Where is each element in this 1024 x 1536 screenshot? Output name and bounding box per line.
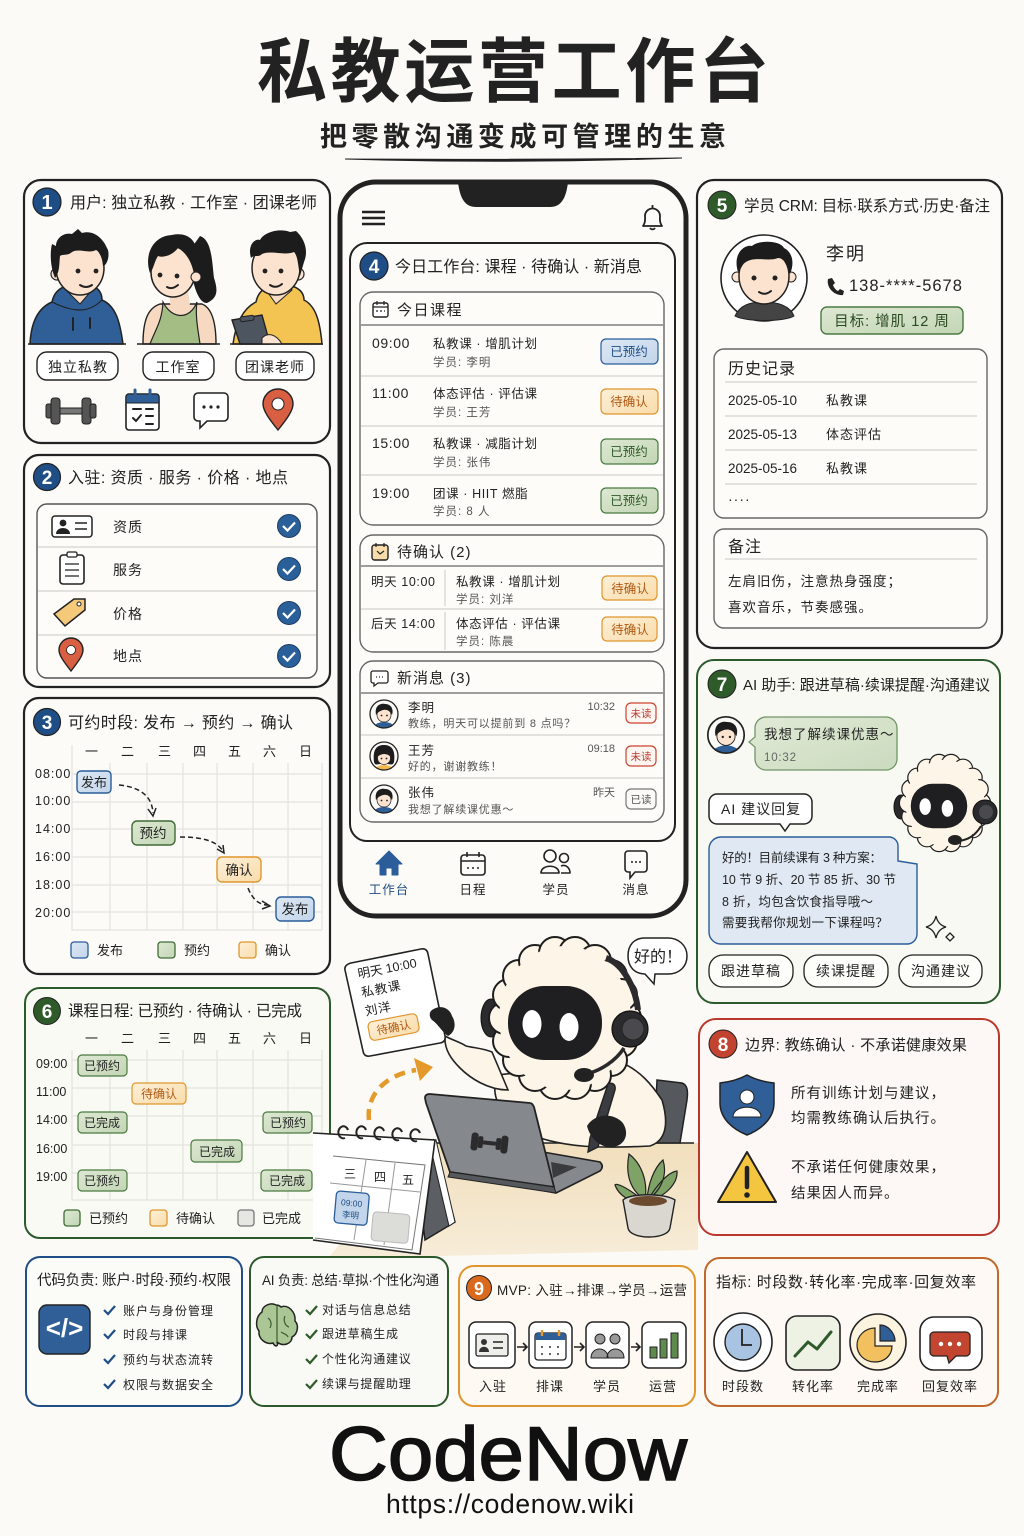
step: operations xyxy=(642,1322,686,1394)
panel 1: users xyxy=(24,180,330,443)
notes box: 喜欢音乐，节奏感强。 xyxy=(728,599,873,615)
nav: messages: 消息 xyxy=(622,882,650,897)
pen and hand xyxy=(587,1083,626,1152)
reply bubble: 10 节 9 折、20 节 85 折、30 节 xyxy=(722,872,896,887)
booking card: 私教课 xyxy=(360,977,403,1000)
step: onboarding: 入驻 xyxy=(479,1379,507,1394)
message li ming xyxy=(370,700,656,736)
row: location: 地点 xyxy=(113,648,143,664)
card: new messages xyxy=(360,661,664,822)
phone number: 138-****-5678 xyxy=(849,277,963,295)
row 11:00: 11:00 xyxy=(372,385,409,401)
schedule grid 6: 三 xyxy=(158,1031,172,1046)
schedule grid xyxy=(35,744,322,930)
schedule grid: 08:00 xyxy=(35,767,71,781)
row 11:00 xyxy=(372,385,658,419)
card: today's classes: 今日课程 xyxy=(397,302,463,319)
icon: warning xyxy=(718,1152,776,1202)
chips: 已完成 xyxy=(269,1173,305,1188)
badge 9 xyxy=(466,1276,492,1300)
desk xyxy=(330,1143,698,1256)
message wang fang: 未读 xyxy=(630,750,652,763)
history box: 历史记录 xyxy=(728,360,796,378)
schedule grid 6: 五 xyxy=(228,1031,242,1046)
badge 9: 9 xyxy=(474,1279,484,1299)
AI reply label xyxy=(709,794,812,831)
card: pending confirmation xyxy=(360,535,664,652)
row 15:00: 学员: 张伟 xyxy=(433,455,491,469)
row 11:00: 待确认 xyxy=(610,395,648,409)
row 09:00: 09:00 xyxy=(372,335,410,351)
panel 8: boundaries xyxy=(699,1019,999,1235)
checklist: code: 账户与身份管理 xyxy=(123,1303,214,1318)
sheep body xyxy=(495,1062,666,1147)
schedule grid 6: 19:00 xyxy=(36,1170,67,1184)
badge 8 xyxy=(709,1030,737,1058)
schedule grid 6: 日 xyxy=(299,1031,313,1046)
legend 3: 预约 xyxy=(184,943,210,958)
booking card: 待确认 xyxy=(375,1017,412,1038)
user bubble: 10:32 xyxy=(764,752,797,764)
message zhang wei: 张伟 xyxy=(408,785,435,800)
notch xyxy=(458,182,568,207)
desk calendar: 五 xyxy=(402,1173,414,1187)
message wang fang: 好的，谢谢教练！ xyxy=(408,759,502,773)
row day after: 待确认 xyxy=(611,623,649,637)
text: coach confirmation xyxy=(791,1085,946,1127)
badge 1 xyxy=(33,188,61,216)
raised arm xyxy=(445,1036,508,1090)
heading 5: 学员 CRM: 目标·联系方式·历史·备注 xyxy=(744,197,990,215)
subtitle: 把零散沟通变成可管理的生意 xyxy=(320,122,726,152)
chip: confirm: 确认 xyxy=(226,863,253,878)
label pills: 独立私教 xyxy=(48,359,108,375)
icon: message xyxy=(371,671,388,686)
message zhang wei: 已读 xyxy=(630,793,652,806)
center illustration xyxy=(313,937,698,1256)
step: onboarding xyxy=(469,1322,515,1394)
row: credentials: 资质 xyxy=(113,519,143,535)
chips: 已完成 xyxy=(84,1115,120,1130)
chip: publish: 发布 xyxy=(81,775,107,790)
row 19:00: 19:00 xyxy=(372,485,410,501)
legend 6: 已完成 xyxy=(262,1211,301,1226)
chip: publish 2 xyxy=(276,897,314,921)
icon: chat bubble xyxy=(194,393,228,428)
checklist: AI: 跟进草稿生成 xyxy=(322,1326,399,1341)
row day after: 后天 14:00 xyxy=(371,617,436,631)
chip: booked: 预约 xyxy=(140,826,166,841)
checklist: code: 权限与数据安全 xyxy=(123,1377,214,1392)
nav: workspace: 工作台 xyxy=(369,882,409,897)
action pills xyxy=(709,955,982,987)
schedule grid: 六 xyxy=(263,744,277,759)
chip: publish 2: 发布 xyxy=(282,902,308,917)
row 11:00: 体态评估 · 评估课 xyxy=(433,387,538,401)
schedule grid 6: 一 xyxy=(85,1031,99,1046)
card: pending confirmation: 待确认 (2) xyxy=(397,544,472,561)
metric: conversion: 转化率 xyxy=(792,1379,834,1394)
bottom navigation xyxy=(369,850,650,897)
icon: code: </> xyxy=(46,1313,83,1343)
heading 2: 入驻: 资质 · 服务 · 价格 · 地点 xyxy=(68,469,288,487)
booking card xyxy=(345,949,445,1056)
legend 6: 待确认 xyxy=(176,1211,215,1226)
schedule grid: 三 xyxy=(158,744,172,759)
step: scheduling xyxy=(529,1322,572,1394)
row 19:00: 团课 · HIIT 燃脂 xyxy=(433,486,528,501)
text: coach confirmation: 均需教练确认后执行。 xyxy=(791,1110,946,1127)
user avatar xyxy=(708,717,744,764)
checklist: AI: 个性化沟通建议 xyxy=(322,1352,412,1366)
schedule grid: 四 xyxy=(193,744,207,759)
step: students: 学员 xyxy=(593,1379,621,1394)
badge 3 xyxy=(34,708,60,736)
badge 5: 5 xyxy=(717,196,728,217)
chips: 已预约 xyxy=(84,1173,120,1188)
row day after xyxy=(371,617,657,648)
nav: workspace xyxy=(369,851,409,897)
row 09:00: 学员: 李明 xyxy=(433,355,491,369)
badge 1: 1 xyxy=(41,192,53,214)
history box: 2025-05-13 xyxy=(728,427,797,442)
sheep head xyxy=(489,937,641,1099)
checklist: code: 时段与排课 xyxy=(123,1327,188,1342)
row: credentials xyxy=(52,514,300,538)
message wang fang: 王芳 xyxy=(408,744,435,758)
reply bubble xyxy=(709,837,917,944)
row 15:00: 15:00 xyxy=(372,435,410,451)
checklist xyxy=(37,504,317,678)
chips xyxy=(78,1055,312,1191)
action pills: 续课提醒 xyxy=(816,963,876,979)
icon: shield xyxy=(720,1075,774,1135)
step: scheduling: 排课 xyxy=(536,1379,564,1394)
plant xyxy=(615,1154,677,1237)
chip: confirm xyxy=(217,857,261,882)
icon: menu xyxy=(362,212,385,224)
chips: 已预约 xyxy=(270,1115,306,1130)
badge 6: 6 xyxy=(42,1002,52,1023)
reply bubble: 需要我帮你规划一下课程吗？ xyxy=(722,915,888,930)
desk calendar: 09:00 xyxy=(341,1197,363,1209)
row 09:00: 已预约 xyxy=(610,344,648,359)
badge 4: 4 xyxy=(369,257,380,278)
nav: schedule: 日程 xyxy=(459,882,487,897)
badge 3: 3 xyxy=(42,713,52,734)
schedule grid: 二 xyxy=(121,744,135,759)
step: students xyxy=(586,1322,629,1394)
history box: 2025-05-16 xyxy=(728,461,797,476)
heading 1: 用户: 独立私教 · 工作室 · 团课老师 xyxy=(70,194,317,212)
speech bubble: 好的！ xyxy=(634,948,682,966)
schedule grid: 一 xyxy=(85,744,99,759)
message li ming: 10:32 xyxy=(587,701,615,713)
arrows xyxy=(119,785,270,909)
checklist: code: 预约与状态流转 xyxy=(123,1352,214,1367)
phone xyxy=(340,182,686,916)
panel 4: today workspace xyxy=(350,243,675,841)
notes box xyxy=(714,529,987,628)
footer logo: CodeNow xyxy=(329,1412,688,1497)
message zhang wei xyxy=(370,785,656,821)
metric: conversion xyxy=(786,1316,840,1394)
row: location xyxy=(59,638,300,671)
icon: dumbbell xyxy=(46,398,96,424)
schedule grid 6: 14:00 xyxy=(36,1113,67,1127)
history box xyxy=(714,349,987,518)
schedule grid: 10:00 xyxy=(35,794,71,808)
user bubble xyxy=(749,717,897,770)
schedule grid 6: 二 xyxy=(121,1031,135,1046)
heading: code: 代码负责: 账户·时段·预约·权限 xyxy=(37,1272,231,1289)
row tomorrow: 明天 10:00 xyxy=(371,575,436,589)
chair xyxy=(654,1080,687,1143)
schedule grid: 16:00 xyxy=(35,850,71,864)
badge 4 xyxy=(360,252,388,280)
text: no health promise: 不承诺任何健康效果， xyxy=(791,1159,946,1176)
student name: 李明 xyxy=(826,244,866,264)
metric: slot count: 时段数 xyxy=(722,1379,764,1394)
goal pill xyxy=(821,307,963,334)
label pills: 工作室 xyxy=(156,359,200,375)
icon: brain xyxy=(257,1304,297,1346)
user bubble: 我想了解续课优惠～ xyxy=(764,727,894,742)
message wang fang xyxy=(370,742,656,777)
notes box: 左肩旧伤，注意热身强度； xyxy=(728,573,902,590)
metric: reply efficiency xyxy=(920,1317,982,1394)
row 09:00 xyxy=(372,335,658,369)
character: group class teacher xyxy=(232,230,322,344)
badge 6 xyxy=(34,998,60,1024)
row 15:00: 已预约 xyxy=(610,444,648,459)
heading 8: 边界: 教练确认 · 不承诺健康效果 xyxy=(745,1037,967,1054)
panel 7: AI assistant xyxy=(697,660,1000,1003)
desk calendar: 三 xyxy=(344,1167,356,1181)
history box: 私教课 xyxy=(826,393,868,408)
metric: completion: 完成率 xyxy=(857,1379,899,1394)
action pills: 跟进草稿 xyxy=(721,963,781,979)
heading: metrics: 指标: 时段数·转化率·完成率·回复效率 xyxy=(716,1273,976,1291)
text: no health promise xyxy=(791,1159,946,1202)
headset xyxy=(574,958,648,1082)
schedule grid 6: 六 xyxy=(263,1031,277,1046)
nav: messages xyxy=(622,851,650,897)
row tomorrow: 学员: 刘洋 xyxy=(456,592,514,606)
student avatar xyxy=(721,235,807,321)
AI reply label: AI 建议回复 xyxy=(721,801,801,817)
label pills: 团课老师 xyxy=(245,359,305,375)
panel: metrics xyxy=(705,1258,998,1406)
nav: students: 学员 xyxy=(542,882,570,897)
schedule grid: 18:00 xyxy=(35,878,71,892)
heading 6: 课程日程: 已预约 · 待确认 · 已完成 xyxy=(68,1002,302,1020)
schedule grid 6 xyxy=(36,1031,322,1200)
schedule grid 6: 16:00 xyxy=(36,1142,67,1156)
message li ming: 李明 xyxy=(408,700,435,715)
badge 2: 2 xyxy=(42,468,52,489)
panel 2: onboarding xyxy=(24,455,330,687)
checklist: AI: 对话与信息总结 xyxy=(322,1302,412,1317)
heading 4: 今日工作台: 课程 · 待确认 · 新消息 xyxy=(395,258,642,276)
footer url: https://codenow.wiki xyxy=(386,1489,634,1519)
goal pill: 目标: 增肌 12 周 xyxy=(834,313,950,330)
checklist: AI: 续课与提醒助理 xyxy=(322,1376,412,1391)
badge 8: 8 xyxy=(718,1035,728,1056)
desk calendar xyxy=(313,1126,455,1254)
sparkles xyxy=(926,916,954,941)
icon: clipboard xyxy=(372,543,388,560)
row: services: 服务 xyxy=(113,562,143,578)
panel 9: MVP xyxy=(459,1266,695,1406)
row 11:00: 学员: 王芳 xyxy=(433,405,491,419)
schedule grid 6: 11:00 xyxy=(36,1085,66,1099)
icon: calendar xyxy=(126,390,159,430)
step arrows xyxy=(517,1343,640,1351)
panel: AI responsibilities xyxy=(250,1257,448,1406)
legend 3 xyxy=(71,942,291,958)
badge 7: 7 xyxy=(717,675,727,696)
notes box: 备注 xyxy=(728,538,762,556)
history box: 体态评估 xyxy=(826,427,882,442)
message wang fang: 09:18 xyxy=(587,743,615,755)
laptop dumbbell logo xyxy=(470,1132,509,1154)
step: operations: 运营 xyxy=(649,1379,677,1394)
headset left cup xyxy=(481,999,501,1037)
checklist: code xyxy=(104,1303,214,1392)
legend 3: 发布 xyxy=(97,943,123,958)
laptop xyxy=(425,1094,602,1193)
badge 7 xyxy=(708,670,736,698)
action pills: 沟通建议 xyxy=(911,963,971,979)
history box: ···· xyxy=(728,491,751,507)
orange arrow xyxy=(369,1058,433,1120)
heading: AI: AI 负责: 总结·草拟·个性化沟通 xyxy=(262,1273,440,1288)
schedule grid: 五 xyxy=(228,744,242,759)
text: no health promise: 结果因人而异。 xyxy=(791,1185,900,1202)
character: studio owner xyxy=(143,234,216,344)
reply bubble: 好的！目前续课有 3 种方案： xyxy=(722,850,882,865)
hand left xyxy=(430,1007,455,1036)
speech bubble xyxy=(628,938,687,984)
panel 6: course schedule xyxy=(25,988,330,1238)
chip: publish xyxy=(77,771,111,793)
row: pricing: 价格 xyxy=(113,606,143,622)
panel: code responsibilities xyxy=(26,1257,242,1406)
history box: 私教课 xyxy=(826,461,868,476)
heading 3: 可约时段: 发布 → 预约 → 确认 xyxy=(68,714,293,732)
reply bubble: 8 折，均包含饮食指导哦～ xyxy=(722,894,873,909)
desk calendar: 四 xyxy=(374,1170,386,1184)
legend 6: 已预约 xyxy=(89,1211,128,1226)
row day after: 体态评估 · 评估课 xyxy=(456,617,561,631)
AI sheep mascot xyxy=(894,754,997,852)
schedule grid: 20:00 xyxy=(35,906,71,920)
panel 5: student CRM xyxy=(697,180,1002,648)
booking card: 明天 10:00 xyxy=(357,956,418,981)
panel 3: available slots xyxy=(24,698,330,974)
label pills xyxy=(37,352,314,380)
heading 7: AI 助手: 跟进草稿·续课提醒·沟通建议 xyxy=(743,677,990,694)
nav: students xyxy=(541,850,570,897)
chips: 已完成 xyxy=(199,1144,235,1159)
chips: 已预约 xyxy=(84,1058,120,1073)
badge 2 xyxy=(34,464,60,490)
card: today's classes xyxy=(360,292,664,525)
card: new messages: 新消息 (3) xyxy=(397,670,472,687)
schedule grid: 日 xyxy=(299,744,313,759)
row 19:00: 已预约 xyxy=(610,493,648,508)
nav: schedule xyxy=(459,852,487,897)
row day after: 学员: 陈晨 xyxy=(456,634,514,648)
booking card: 刘洋 xyxy=(364,999,393,1019)
row tomorrow: 私教课 · 增肌计划 xyxy=(456,574,561,589)
message li ming: 未读 xyxy=(630,707,652,720)
chip: booked xyxy=(132,821,175,845)
badge 5 xyxy=(708,191,736,219)
desk calendar: 李明 xyxy=(342,1209,359,1221)
message zhang wei: 我想了解续课优惠～ xyxy=(408,802,514,816)
row tomorrow xyxy=(371,574,657,606)
row 19:00: 学员: 8 人 xyxy=(433,504,490,518)
text: coach confirmation: 所有训练计划与建议， xyxy=(791,1085,946,1102)
title: 私教运营工作台 xyxy=(257,33,769,111)
message li ming: 教练，明天可以提前到 8 点吗？ xyxy=(408,716,576,730)
row 15:00 xyxy=(372,435,658,469)
row 15:00: 私教课 · 减脂计划 xyxy=(433,436,538,451)
legend 3: 确认 xyxy=(265,943,291,958)
row tomorrow: 待确认 xyxy=(611,582,649,596)
message zhang wei: 昨天 xyxy=(593,786,615,799)
history box: 2025-05-10 xyxy=(728,393,797,408)
metric: completion xyxy=(850,1314,906,1394)
legend 6 xyxy=(64,1210,301,1226)
metric: reply efficiency: 回复效率 xyxy=(922,1379,978,1394)
schedule grid 6: 09:00 xyxy=(36,1057,67,1071)
heading 9: MVP: 入驻→排课→学员→运营 xyxy=(497,1283,687,1298)
character: independent coach xyxy=(30,229,123,344)
icon: bell xyxy=(643,205,662,229)
row 19:00 xyxy=(372,485,658,518)
chips: 待确认 xyxy=(141,1087,177,1101)
row: pricing xyxy=(54,599,300,626)
schedule grid 6: 四 xyxy=(193,1031,207,1046)
checklist: AI xyxy=(306,1302,412,1391)
row: services xyxy=(60,552,300,584)
icon: code xyxy=(39,1305,90,1354)
icon: calendar small xyxy=(373,301,388,317)
row 09:00: 私教课 · 增肌计划 xyxy=(433,336,538,351)
schedule grid: 14:00 xyxy=(35,822,71,836)
metric: slot count xyxy=(714,1313,772,1394)
icon: location pin xyxy=(263,389,293,430)
